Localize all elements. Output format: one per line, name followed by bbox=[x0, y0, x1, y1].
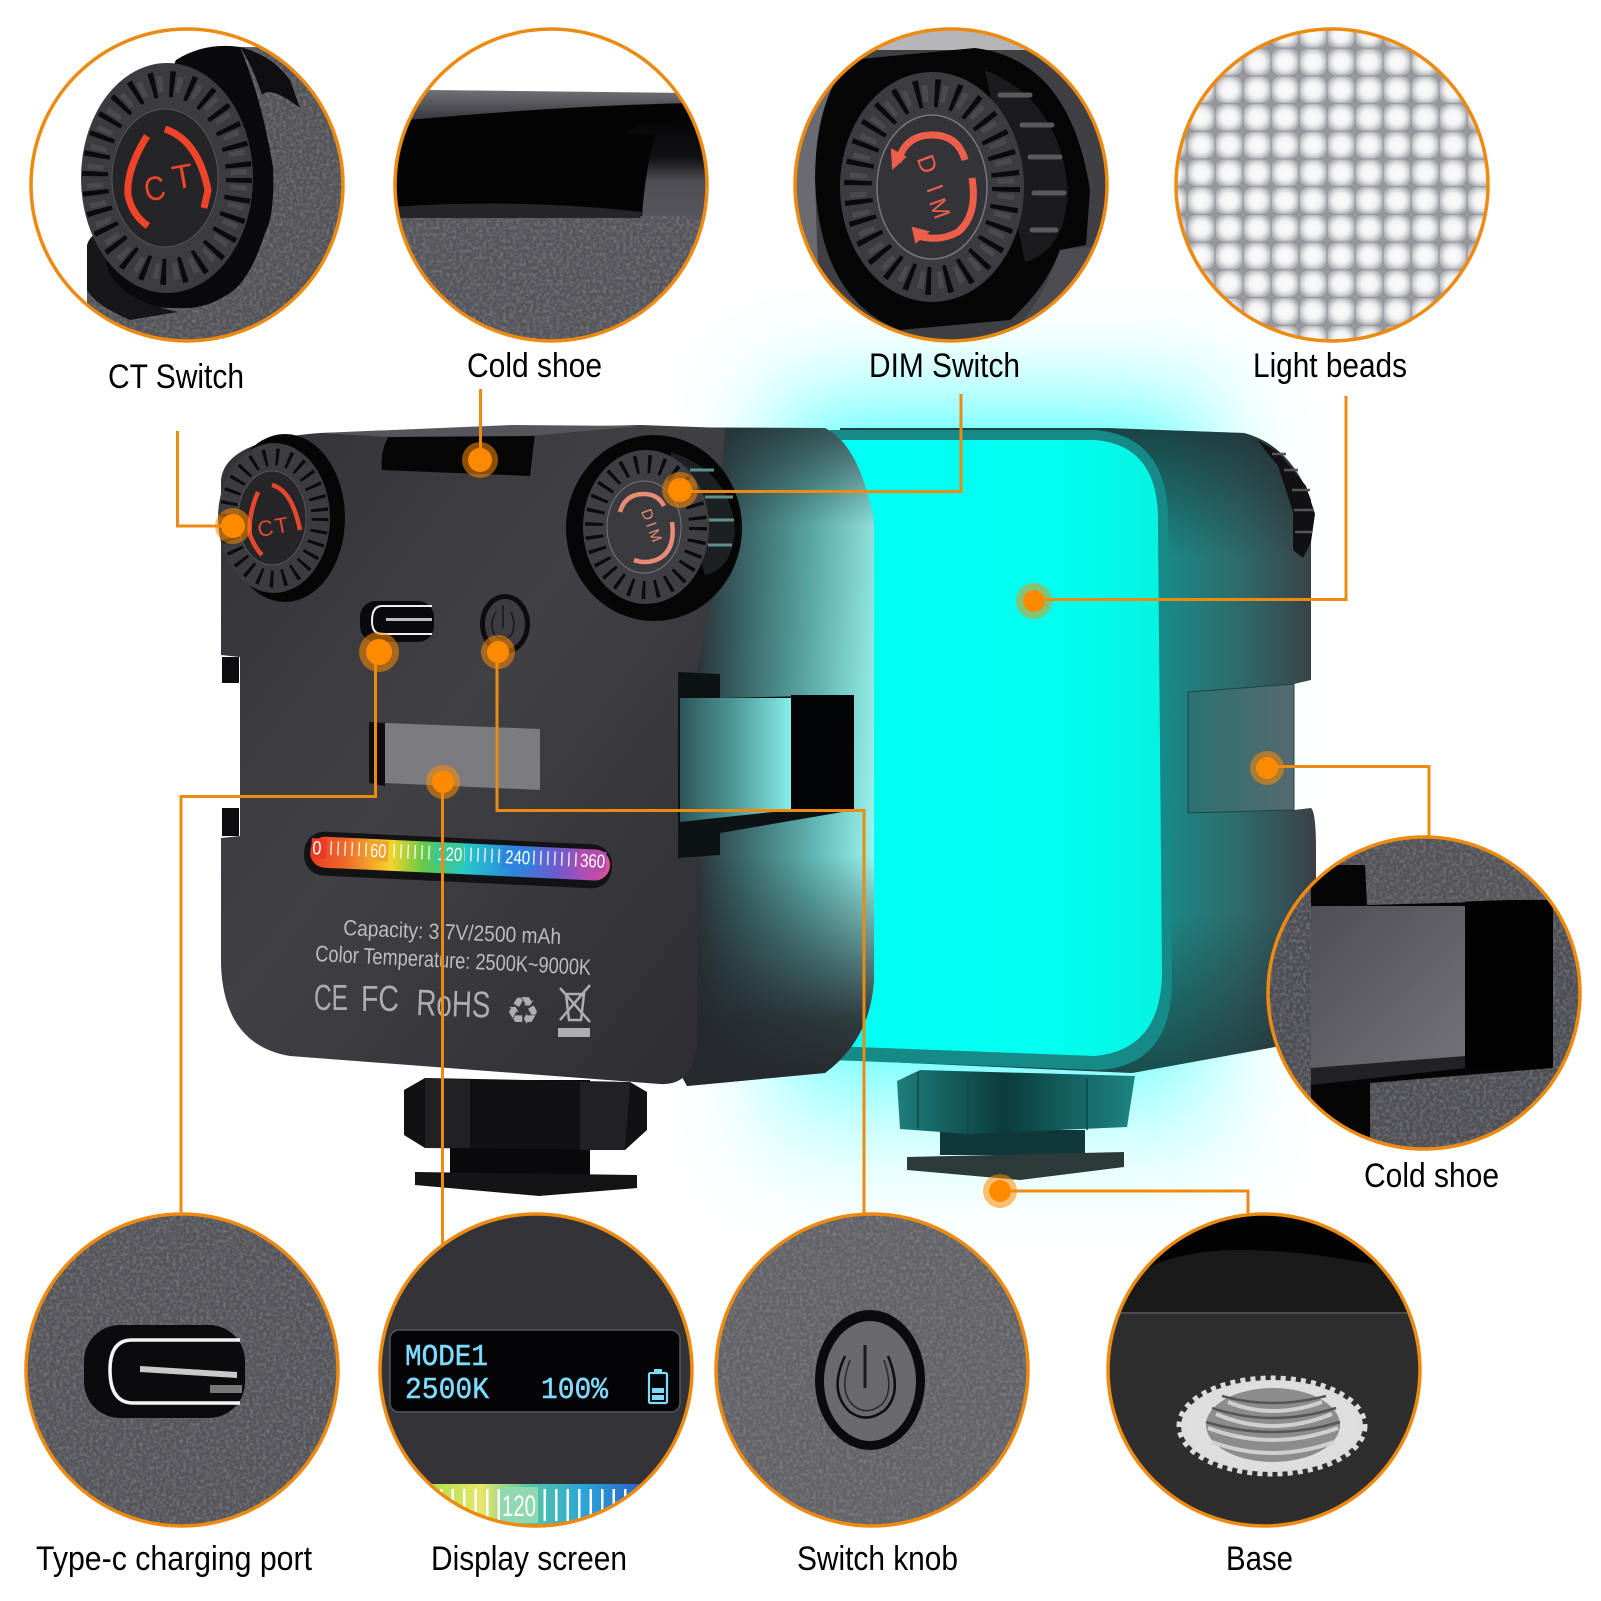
rainbow strip bbox=[432, 1484, 640, 1524]
side knob bbox=[1257, 440, 1315, 558]
front unit: hot shoe foot bbox=[404, 1078, 647, 1196]
knob bbox=[840, 70, 1068, 302]
callout labels: lower: Type-c charging port bbox=[36, 1540, 312, 1578]
spec text: Color Temperature: 2500K~9000K bbox=[315, 941, 592, 980]
callout labels: top row: Cold shoe bbox=[467, 347, 602, 385]
hue rainbow bar: 120 bbox=[437, 844, 463, 866]
side notch bbox=[1188, 684, 1294, 813]
back body bbox=[840, 428, 1316, 1073]
callout labels: top row: Light beads bbox=[1253, 347, 1407, 385]
callout labels: top row: CT Switch bbox=[108, 358, 244, 396]
callout labels: top row: DIM Switch bbox=[869, 347, 1020, 385]
lit panel frame bbox=[830, 430, 1172, 1070]
CT arrows and text: T bbox=[169, 157, 197, 198]
leader lines bbox=[178, 389, 1429, 1246]
CT knob: C T bbox=[255, 512, 290, 542]
DIM arrows and text: I bbox=[920, 181, 948, 197]
OLED screen: 2500K bbox=[405, 1373, 489, 1408]
hue rainbow bar: 360 bbox=[580, 851, 606, 873]
rainbow strip: 120 bbox=[502, 1490, 536, 1523]
circle: light beads detail bbox=[1176, 29, 1488, 341]
DIM knob bbox=[566, 435, 742, 621]
callout labels: lower: Switch knob bbox=[797, 1540, 958, 1578]
hue rainbow bar bbox=[303, 831, 613, 889]
marker dots bbox=[215, 442, 1284, 1208]
hue rainbow bar: 0 bbox=[312, 838, 322, 860]
USB-C port bbox=[360, 601, 434, 642]
hue rainbow bar: 60 bbox=[370, 841, 387, 863]
cold shoe slot bbox=[382, 433, 535, 476]
callout labels: lower bbox=[36, 1157, 1499, 1578]
DIM arrows and text: D bbox=[911, 151, 942, 177]
circle: display screen detail bbox=[378, 1212, 694, 1534]
back unit: lit RGB panel and body bbox=[830, 428, 1316, 1073]
back unit: hot shoe foot bbox=[897, 1070, 1135, 1180]
callout labels: lower: Display screen bbox=[431, 1540, 627, 1578]
CT arrows and text bbox=[128, 129, 208, 226]
DIM knob: DIM bbox=[637, 507, 665, 544]
certification marks: RoHS bbox=[416, 982, 491, 1026]
left notches bbox=[222, 657, 239, 836]
circle: switch knob detail bbox=[714, 1212, 1032, 1530]
circle: DIM switch detail bbox=[790, 25, 1115, 350]
callout labels: lower: Cold shoe bbox=[1364, 1157, 1499, 1195]
CT knob bbox=[218, 434, 345, 602]
certification marks bbox=[314, 977, 590, 1037]
CT arrows and text: C bbox=[141, 169, 168, 210]
spec text: Capacity: 3.7V/2500 mAh bbox=[343, 915, 562, 949]
spec text bbox=[315, 915, 592, 980]
OLED screen: 100% bbox=[541, 1373, 608, 1408]
circle: CT switch detail bbox=[30, 28, 350, 345]
threaded mount bbox=[1181, 1380, 1363, 1472]
knob bbox=[81, 63, 253, 293]
certification marks: ♻ bbox=[506, 989, 540, 1033]
circle: base detail bbox=[1106, 1212, 1422, 1530]
display window bbox=[369, 722, 540, 790]
OLED screen bbox=[390, 1330, 680, 1412]
DIM arrows and text: M bbox=[923, 195, 955, 223]
certification marks: CE bbox=[314, 977, 348, 1018]
circle: cold shoe detail bbox=[390, 28, 715, 349]
callout labels: lower: Base bbox=[1226, 1540, 1293, 1578]
background glow bbox=[760, 370, 1230, 1160]
callout labels: top row bbox=[108, 347, 1407, 396]
front unit bbox=[218, 425, 874, 1086]
OLED screen: MODE1 bbox=[405, 1340, 488, 1375]
side dovetail slot bbox=[678, 672, 854, 858]
circle: Type-C charging port detail bbox=[25, 1212, 340, 1530]
lit panel bbox=[830, 440, 1162, 1056]
front face bbox=[221, 425, 725, 1084]
DIM arrows and text bbox=[892, 135, 973, 242]
power button bbox=[480, 594, 530, 654]
front unit side panel bbox=[590, 427, 874, 1086]
certification marks: FC bbox=[361, 978, 399, 1019]
circle: side cold shoe detail bbox=[1265, 825, 1590, 1160]
hue rainbow bar: 240 bbox=[505, 847, 531, 869]
